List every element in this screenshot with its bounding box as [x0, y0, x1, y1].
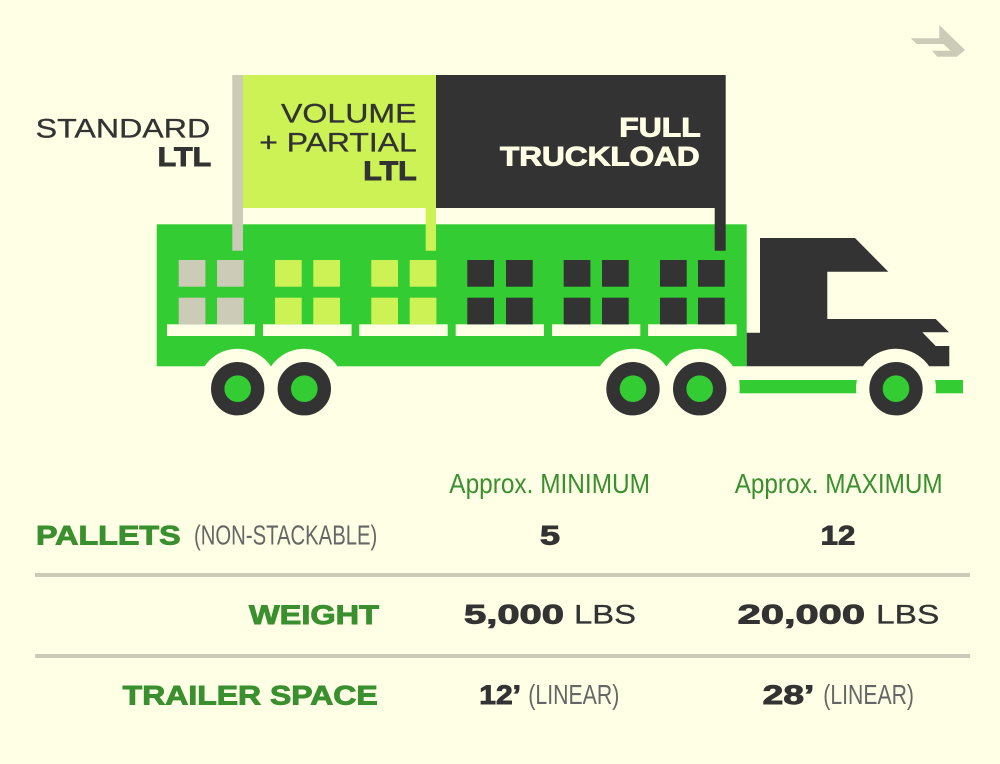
- panel: standard LTL: [36, 75, 243, 251]
- wheel arches: [198, 349, 936, 429]
- trailer body: [157, 224, 747, 366]
- pallets minimum: 5: [540, 520, 560, 550]
- row: pallets: [36, 520, 855, 550]
- trailer space maximum: [763, 679, 914, 710]
- chassis bars: [739, 380, 963, 393]
- icon: logo arrow: [911, 25, 965, 57]
- full truckload pallet boxes: [467, 260, 725, 324]
- note: non-stackable: (NON-STACKABLE): [194, 520, 377, 550]
- dark flag: [436, 75, 726, 251]
- trailer space minimum: [479, 679, 619, 710]
- column heading: maximum: Approx. MAXIMUM: [735, 468, 943, 499]
- trailer space maximum: (LINEAR): [823, 679, 914, 710]
- standard LTL pallet boxes: [179, 260, 244, 324]
- label: full truckload: TRUCKLOAD: [500, 141, 700, 171]
- trailer space maximum: 28’: [763, 680, 814, 710]
- column heading: minimum: Approx. MINIMUM: [449, 468, 650, 499]
- wheels: [218, 369, 916, 409]
- panel: full truckload: [436, 75, 726, 251]
- row label: trailer space: TRAILER SPACE: [123, 680, 378, 710]
- lime flag: [243, 75, 436, 251]
- weight minimum: LBS: [574, 600, 636, 630]
- panel: volume and partial LTL: [243, 75, 436, 251]
- pallet bases: [167, 324, 737, 336]
- pallets maximum: 12: [821, 520, 855, 550]
- comparison table: [35, 468, 970, 710]
- weight maximum: LBS: [876, 600, 939, 630]
- truck cab: [747, 238, 949, 366]
- label: full truckload: FULL: [619, 113, 701, 143]
- volume and partial LTL pallet boxes: [275, 260, 436, 324]
- row: weight: [249, 600, 939, 630]
- weight maximum: 20,000: [738, 600, 865, 630]
- weight minimum: 5,000: [464, 600, 564, 630]
- label: volume and partial LTL: VOLUME: [281, 98, 416, 128]
- trailer space minimum: 12’: [479, 680, 521, 710]
- row label: weight: WEIGHT: [249, 600, 379, 630]
- label: volume and partial LTL: LTL: [363, 156, 417, 186]
- label: standard LTL: LTL: [158, 142, 211, 172]
- label: volume and partial LTL: + PARTIAL: [259, 127, 417, 157]
- truck illustration: [157, 224, 963, 429]
- trailer space minimum: (LINEAR): [528, 679, 619, 710]
- label: standard LTL: STANDARD: [36, 113, 210, 143]
- row: trailer space: [123, 679, 914, 710]
- row label: pallets: PALLETS: [36, 520, 181, 550]
- standard LTL marker bar: [232, 75, 243, 251]
